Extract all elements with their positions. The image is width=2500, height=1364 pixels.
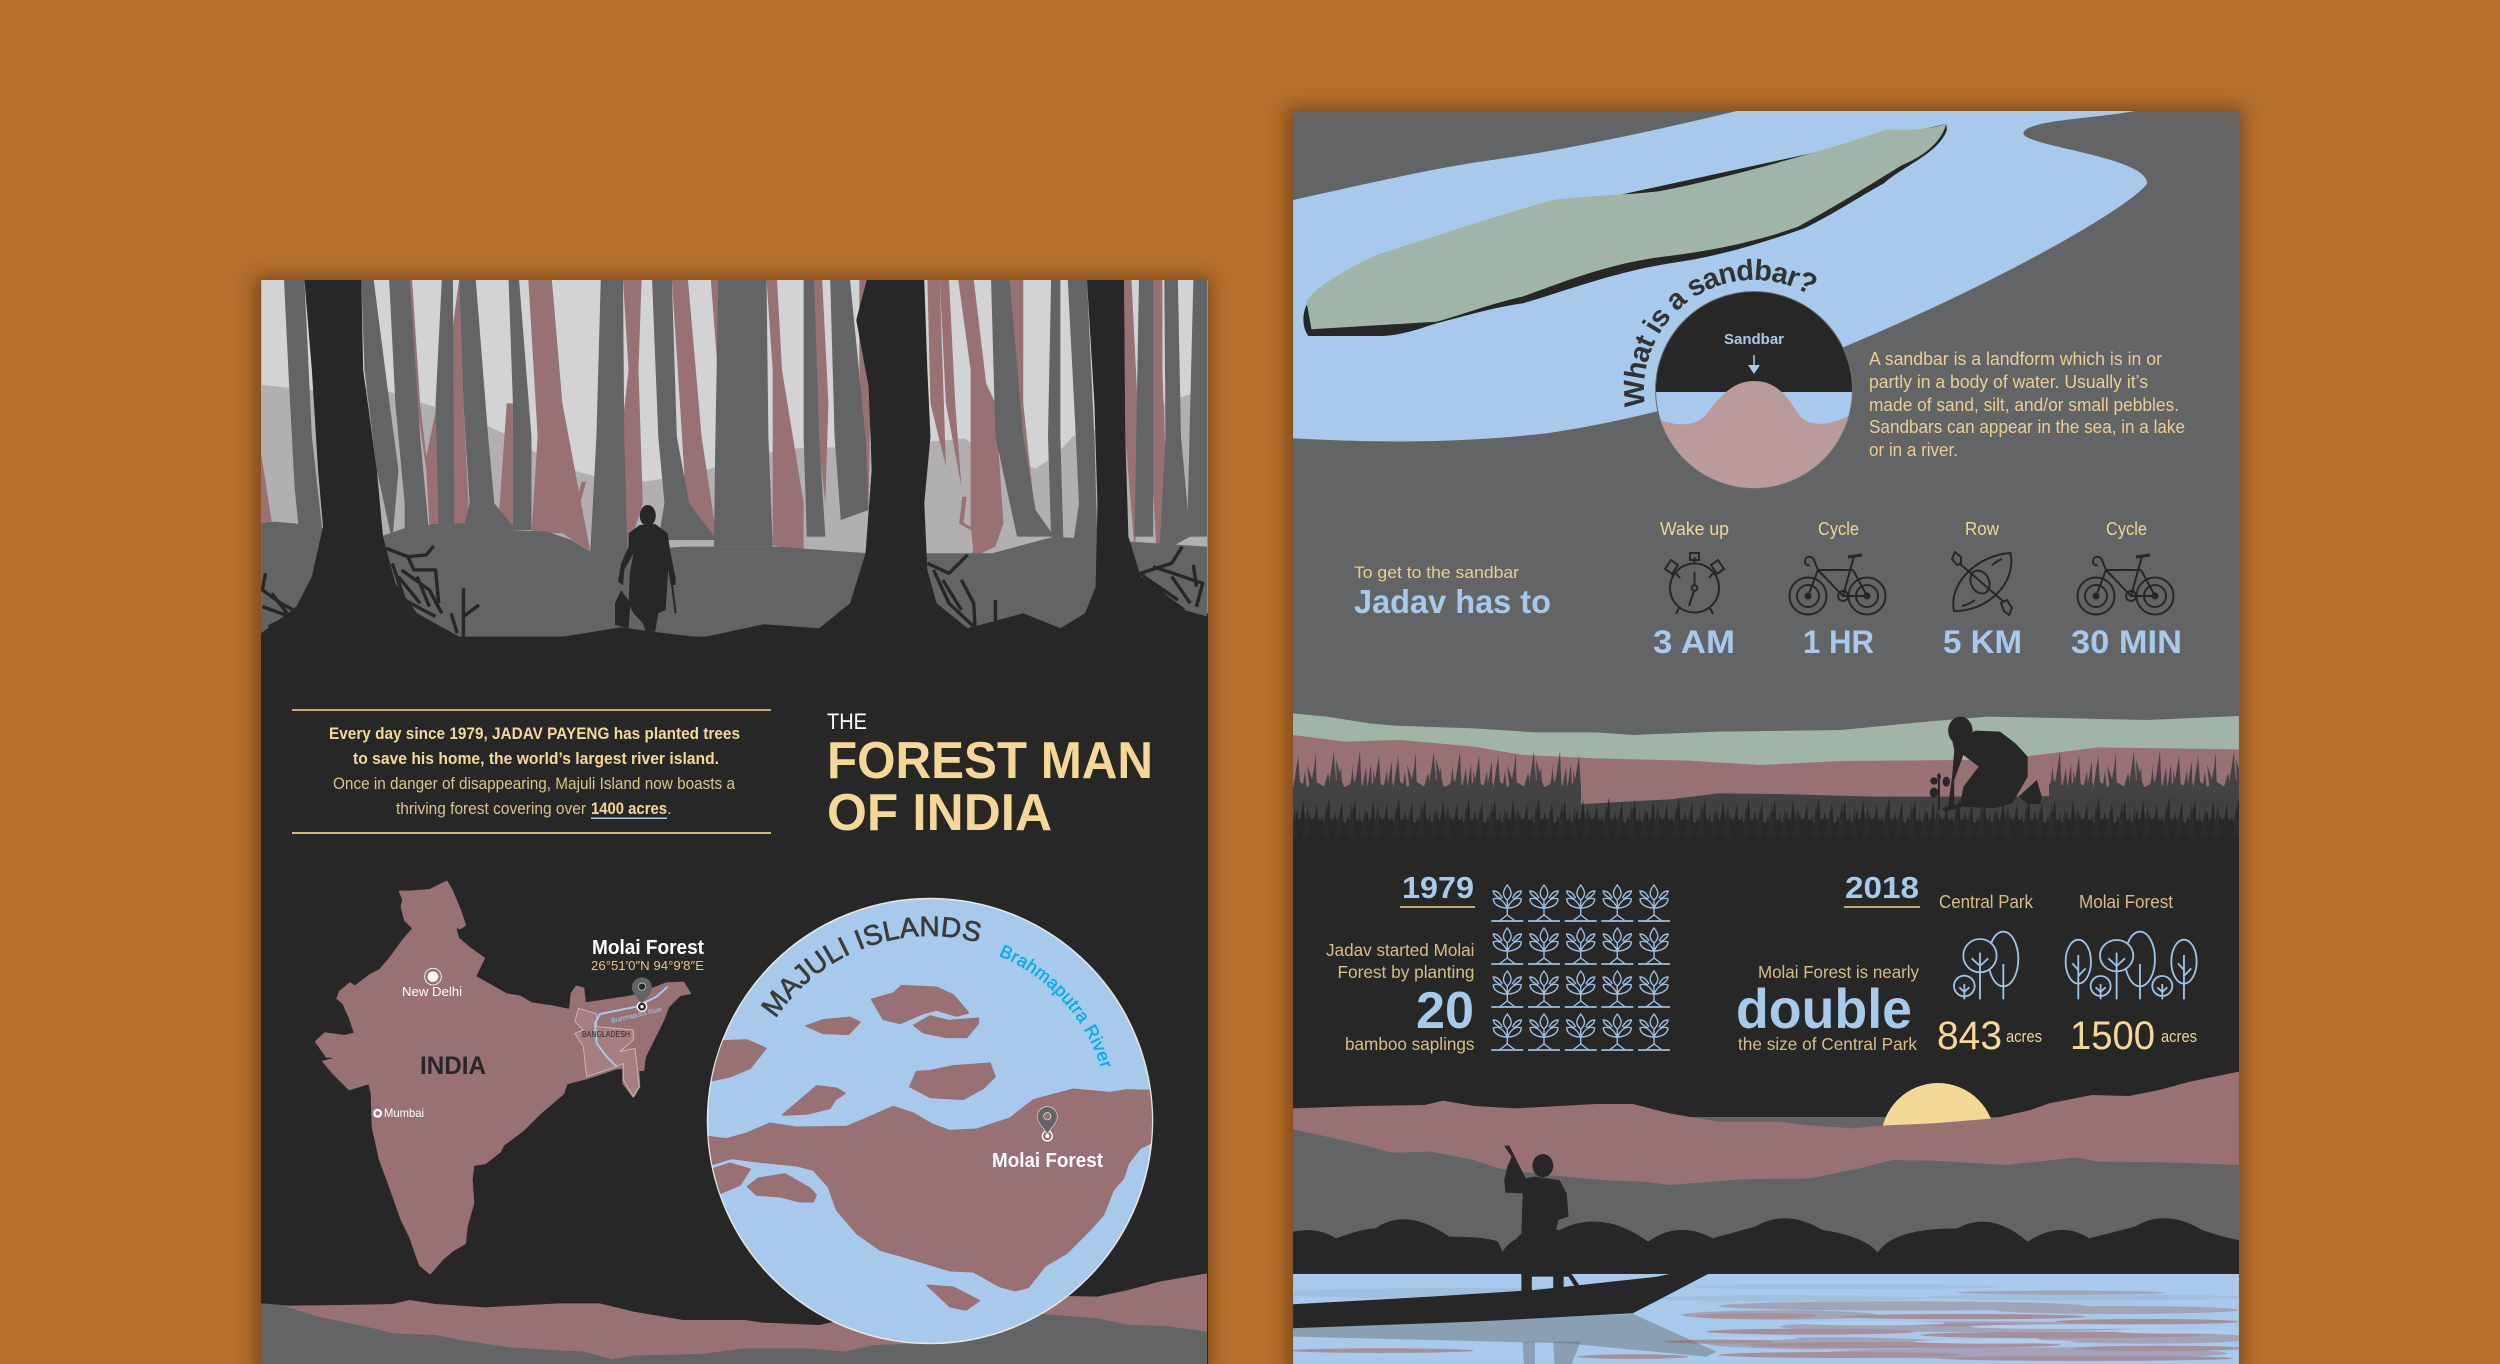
map of India: INDIA (420, 1052, 486, 1080)
comparison: Central Park (1937, 892, 2042, 1058)
journey heading (1354, 563, 1551, 620)
map of India (316, 882, 704, 1273)
pin: Molai Forest (1037, 1107, 1057, 1141)
panel shadows (255, 107, 2242, 1364)
comparison: Central Park: Central Park (1939, 892, 2034, 912)
water (1278, 1274, 2257, 1364)
map of India: BANGLADESH (582, 1030, 630, 1039)
step: cycle 30 minutes: Cycle (2106, 519, 2147, 539)
icon: alarm clock (1665, 553, 1724, 614)
comparison: Molai Forest (2066, 892, 2197, 1058)
stats: 1979: Jadav started Molai (1326, 940, 1474, 960)
title: OF INDIA (827, 784, 1052, 842)
panel: right poster (1293, 111, 2239, 1364)
stats: 2018: Molai Forest is nearly (1758, 962, 1919, 982)
sandbar definition: Sandbars can appear in the sea, in a lake (1869, 417, 2185, 437)
comparison: Central Park: acres (2006, 1027, 2042, 1046)
stats: 2018: double (1736, 977, 1912, 1040)
intro text block: . (667, 799, 672, 818)
heading: what is a sandbar: What is a sandbar? (1624, 258, 1816, 408)
journey heading: To get to the sandbar (1354, 563, 1519, 582)
step: row: Row (1965, 519, 2000, 539)
stats: 1979: bamboo saplings (1345, 1034, 1475, 1054)
map of India: Brahmaputra River (611, 1006, 664, 1025)
title: FOREST MAN (827, 732, 1153, 790)
river and sandbar illustration (1293, 111, 2147, 441)
Bangladesh region (575, 1008, 639, 1097)
planting scene (1293, 713, 2239, 840)
icon: trees (1954, 932, 2018, 999)
India outline (316, 882, 690, 1273)
intro text block: to save his home, the world’s largest river island. (353, 749, 719, 768)
stats: 2018: 2018 (1845, 870, 1919, 905)
panel: left poster (261, 280, 1208, 1364)
dark stats section background (1293, 837, 2239, 1117)
silhouette: kneeling man planting (1930, 717, 2042, 812)
stats: 1979: 20 (1416, 982, 1474, 1040)
map of India: New Delhi (402, 985, 462, 999)
circle map title: MAJULI ISLANDS (760, 916, 981, 1018)
stats: 2018: the size of Central Park (1738, 1034, 1917, 1054)
sandbar diagram: Sandbar (1724, 331, 1784, 348)
pictogram: 20 saplings (1491, 885, 1670, 1050)
comparison: Central Park: 843 (1937, 1014, 2002, 1058)
intro text block: 1400 acres (591, 799, 667, 818)
step: row: 5 KM (1943, 624, 2022, 660)
step: wake up (1653, 519, 1735, 660)
step: cycle 1 hour: 1 HR (1803, 624, 1874, 660)
icon: trees (2066, 932, 2197, 999)
roots and branches (262, 546, 1203, 637)
boatman and boat (1293, 1145, 1708, 1328)
intro text block: thriving forest covering over (396, 799, 586, 818)
step: wake up: 3 AM (1653, 624, 1735, 660)
step: cycle 1 hour: Cycle (1818, 519, 1859, 539)
icon: kayak (1952, 552, 2012, 615)
comparison: Molai Forest: acres (2161, 1027, 2197, 1046)
sun (1881, 1083, 1995, 1197)
forest illustration (261, 280, 1208, 673)
map of India: Mumbai (384, 1106, 424, 1120)
step: cycle 30 minutes: 30 MIN (2071, 624, 2182, 660)
bottom hills, left poster (261, 1273, 1207, 1364)
stats: 1979: 1979 (1402, 870, 1474, 905)
comparison: Molai Forest: 1500 (2070, 1014, 2155, 1058)
step: cycle 1 hour (1790, 519, 1886, 660)
title: THE (827, 709, 867, 734)
river label: Brahmaputra River (1000, 944, 1111, 1066)
circle map: Majuli islands (706, 898, 1154, 1344)
label: Molai Forest: Molai Forest (992, 1150, 1103, 1172)
journey heading: Jadav has to (1354, 583, 1551, 620)
step: row (1943, 519, 2022, 660)
Brahmaputra on map (595, 987, 668, 1067)
sandbar definition (1869, 349, 2185, 460)
intro text block: Every day since 1979, JADAV PAYENG has planted trees (329, 724, 740, 743)
pin (632, 977, 652, 1011)
map of India: Molai Forest (592, 937, 704, 959)
sandbar definition: A sandbar is a landform which is in or (1869, 349, 2162, 369)
map of India: 26°51′0″N 94°9′8″E (591, 958, 704, 973)
sapling (1930, 773, 1950, 810)
sandbar definition: made of sand, silt, and/or small pebbles. (1869, 395, 2179, 415)
sandbar diagram (1655, 291, 1853, 489)
intro text block (292, 709, 771, 834)
stats: 1979: Forest by planting (1338, 962, 1474, 982)
silhouette: man walking (615, 505, 676, 632)
stats: 2018 (1736, 870, 1920, 1054)
sandbar definition: or in a river. (1869, 440, 1958, 460)
boat reflection (1293, 1314, 1717, 1364)
icon: bicycle (1790, 555, 1886, 614)
sandbar definition: partly in a body of water. Usually it’s (1869, 372, 2148, 392)
New Delhi marker (425, 968, 441, 985)
icon: bicycle (2078, 555, 2174, 614)
intro text block: Once in danger of disappearing, Majuli Island now boasts a (333, 774, 735, 793)
title (827, 714, 1150, 830)
comparison: Molai Forest: Molai Forest (2079, 892, 2173, 912)
step: cycle 30 minutes (2071, 519, 2182, 660)
stats: 1979 (1326, 870, 1475, 1054)
step: wake up: Wake up (1660, 519, 1729, 539)
sunset landscape (1278, 1072, 2257, 1364)
Mumbai marker (374, 1110, 381, 1117)
